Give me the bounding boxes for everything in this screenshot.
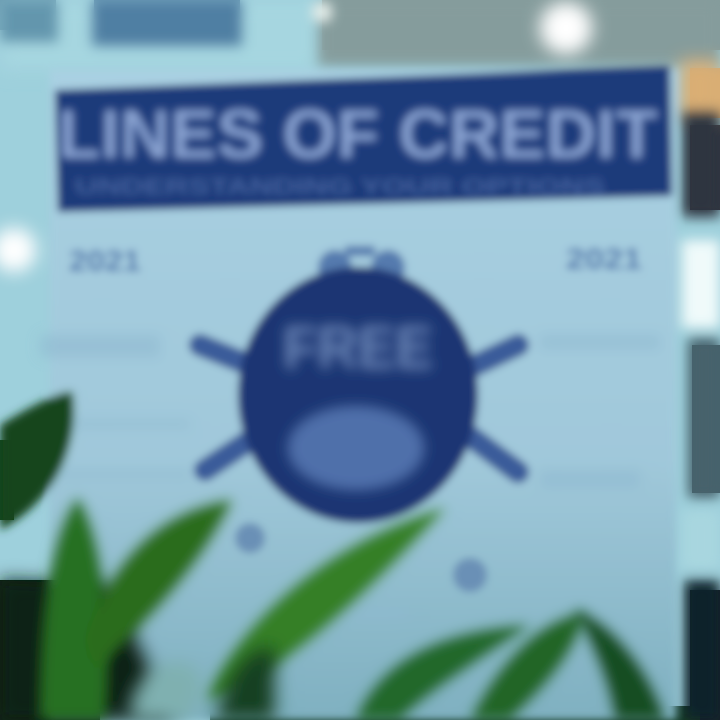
panel: poster [50,70,676,720]
panel: poster text lines [40,335,660,620]
connector arms [200,345,518,472]
background: blurred room [0,0,720,272]
right edge: blurred surroundings [680,60,720,720]
plants: foreground foliage [0,392,665,720]
top left label: 2021 [69,245,141,278]
badge upper text: FREE [283,314,433,381]
subtitle: UNDERSTANDING YOUR OPTIONS [75,174,605,199]
title: LINES OF CREDIT [58,95,658,173]
badge lower panel [288,406,424,490]
small dots [235,523,487,592]
top nodes [318,246,405,286]
top right label: 2021 [566,243,642,276]
header band [55,66,672,212]
central badge diagram [200,246,518,523]
navy circle [238,267,478,523]
